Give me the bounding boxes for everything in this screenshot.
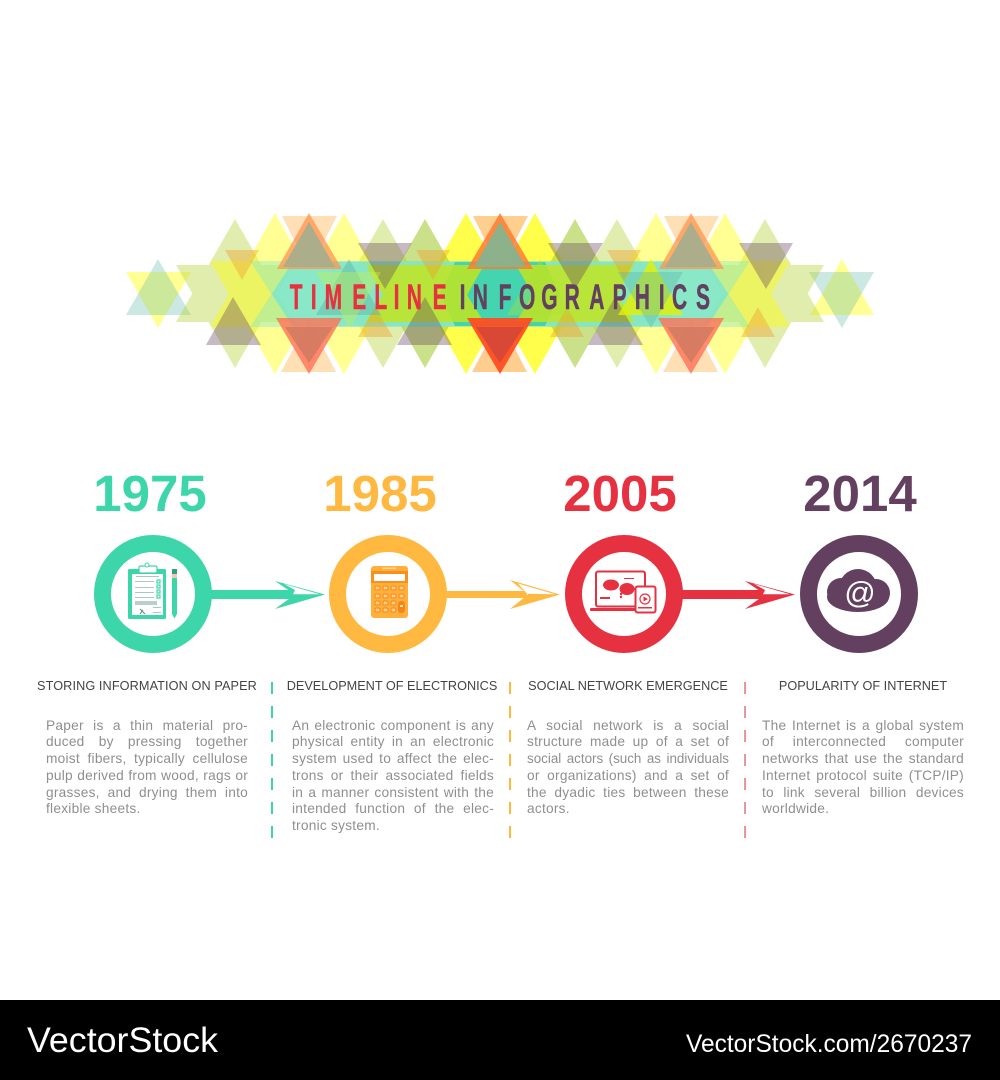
text block 1: flexible sheets. xyxy=(46,801,141,816)
dashed divider 2 xyxy=(509,682,511,838)
arrow 2 xyxy=(445,580,560,609)
text block 4: to link several billion devices xyxy=(762,785,964,800)
dashed divider 1 xyxy=(271,682,273,838)
year 2014: 2014 xyxy=(803,465,917,522)
circle 1975 xyxy=(102,544,204,644)
text block 4: Internet protocol suite (TCP/IP) xyxy=(762,768,964,783)
footer bar xyxy=(0,1000,1000,1080)
red and orange triangles xyxy=(276,213,724,374)
text block 3: structure made up of a set of xyxy=(527,734,729,749)
icon: calculator xyxy=(371,566,408,618)
text block 3: A social network is a social xyxy=(527,718,729,732)
text block 4: worldwide. xyxy=(762,801,829,816)
text block 1: moist fibers, typically cellulose xyxy=(46,751,248,766)
text block 2: trons or their associated fields xyxy=(292,768,494,783)
circle 2005 xyxy=(574,544,674,644)
circle 2014 xyxy=(808,544,910,644)
text block 3: the dyadic ties between these xyxy=(527,785,729,800)
text block 2: physical entity in an electronic xyxy=(292,734,494,749)
text block 1: Paper is a thin material pro- xyxy=(46,718,248,732)
text block 1: pulp derived from wood, rags or xyxy=(46,768,248,783)
heading 2: DEVELOPMENT OF ELECTRONICS xyxy=(287,679,497,693)
text block 2: An electronic component is any xyxy=(292,718,494,732)
text block 3: or organizations) and a set of xyxy=(527,768,729,783)
heading 3: SOCIAL NETWORK EMERGENCE xyxy=(528,679,728,693)
lime zones over band xyxy=(366,265,634,322)
year 1975: 1975 xyxy=(93,465,207,522)
text block 2: tronic system. xyxy=(292,818,380,833)
small stars over band xyxy=(316,259,381,315)
title: INFOGRAPHICS xyxy=(460,279,710,317)
text block 3 xyxy=(527,718,729,816)
year 2005: 2005 xyxy=(563,465,677,522)
dashed divider 3 xyxy=(744,682,746,838)
footer logo text: VectorStock xyxy=(27,1021,219,1060)
title banner of overlapping triangles xyxy=(126,213,874,374)
arrow 3 xyxy=(681,581,795,609)
text block 2: intended function of the elec- xyxy=(292,801,494,816)
text block 2: system used to affect the elec- xyxy=(292,751,494,766)
footer url text: VectorStock.com/2670237 xyxy=(686,1030,972,1058)
text block 4 xyxy=(762,718,964,816)
arrow 1 xyxy=(210,581,325,609)
text block 3: social actors (such as individuals xyxy=(527,751,729,766)
circle 1985 xyxy=(338,544,438,644)
icon: cloud with at sign: @ xyxy=(844,575,876,610)
title: TIMELINE xyxy=(290,279,447,317)
teal band behind title xyxy=(250,261,750,327)
year 1985: 1985 xyxy=(323,465,437,522)
icon: cloud with at sign xyxy=(827,569,890,612)
title xyxy=(290,279,710,317)
icon: laptop and tablet xyxy=(590,572,656,612)
text block 1: duced by pressing together xyxy=(46,734,248,749)
heading 4: POPULARITY OF INTERNET xyxy=(779,679,947,693)
small star left xyxy=(126,259,191,328)
text block 4: of interconnected computer xyxy=(762,734,964,749)
text block 4: The Internet is a global system xyxy=(762,718,964,732)
text block 1 xyxy=(46,718,248,816)
heading 1: STORING INFORMATION ON PAPER xyxy=(37,679,257,693)
text block 2: in a manner consistent with the xyxy=(292,785,494,800)
small star right xyxy=(809,259,874,328)
icon: clipboard and pencil xyxy=(128,563,177,619)
text block 1: grasses, and drying them into xyxy=(46,785,248,800)
text block 4: networks that use the standard xyxy=(762,751,964,766)
text block 2 xyxy=(292,718,494,833)
text block 3: actors. xyxy=(527,801,570,816)
